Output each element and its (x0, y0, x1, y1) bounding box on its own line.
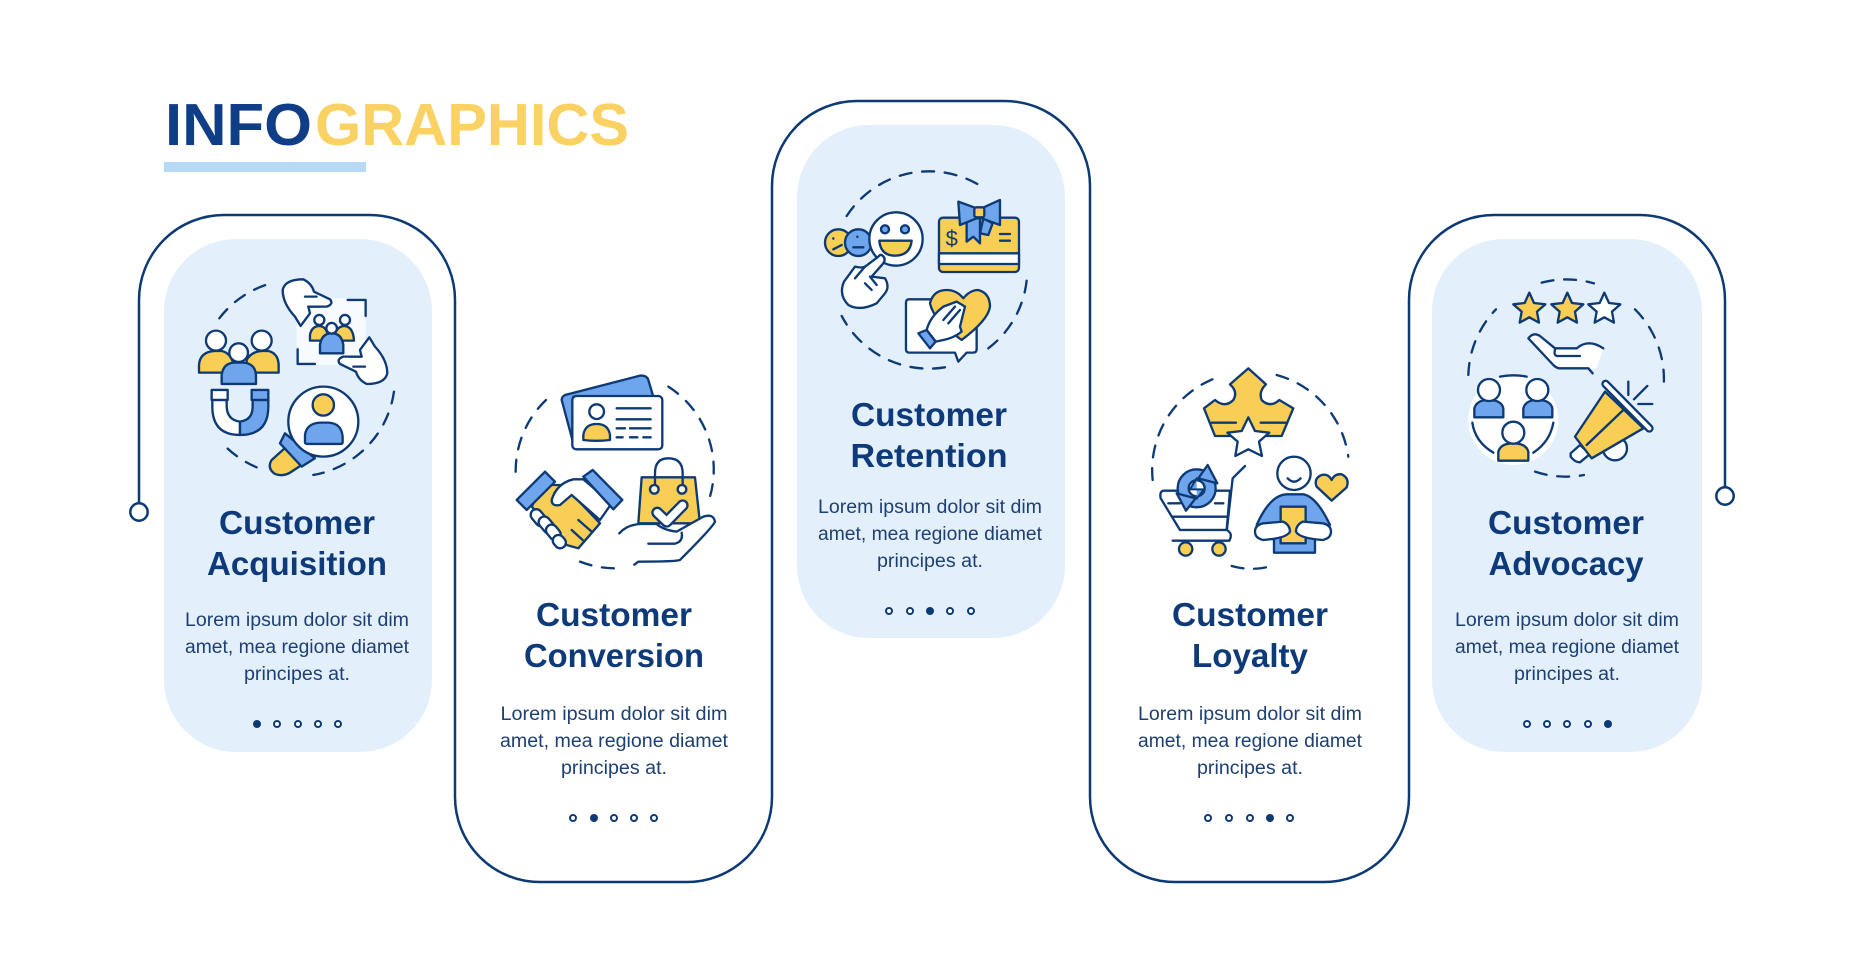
heading: Retention (850, 437, 1008, 474)
body text: Lorem ipsum dolor sit dim (185, 610, 409, 631)
heading: Conversion (524, 637, 704, 674)
pagination dots (253, 720, 341, 728)
heading: Acquisition (207, 545, 387, 582)
panel: customer loyalty (1138, 368, 1363, 822)
body text: Lorem ipsum dolor sit dim (1455, 610, 1679, 631)
icon: loyalty (1152, 368, 1348, 569)
title (165, 92, 629, 158)
heading (850, 396, 1008, 474)
icon: advocacy (1468, 279, 1664, 477)
heading: Customer (1172, 596, 1328, 633)
heading: Customer (851, 396, 1007, 433)
panel: customer advocacy (1432, 239, 1702, 752)
body text: amet, mea regione diamet (1138, 731, 1363, 752)
title underline (164, 162, 366, 172)
body text: principes at. (244, 664, 350, 685)
heading (1172, 596, 1328, 674)
body text (185, 610, 410, 685)
pagination dots (1205, 814, 1293, 822)
pagination dots (886, 607, 974, 615)
body text (1455, 610, 1680, 685)
icon: retention (825, 171, 1027, 369)
body text (1138, 704, 1363, 779)
icon: conversion (516, 376, 715, 568)
body text: amet, mea regione diamet (818, 524, 1043, 545)
heading: Loyalty (1192, 637, 1309, 674)
body text: principes at. (877, 551, 983, 572)
body text: Lorem ipsum dolor sit dim (818, 497, 1042, 518)
body text: principes at. (561, 758, 667, 779)
icon: acquisition (199, 279, 394, 475)
panel: customer retention (797, 125, 1065, 638)
heading (524, 596, 704, 674)
pagination dots (1524, 720, 1612, 728)
heading: Advocacy (1488, 545, 1644, 582)
body text (818, 497, 1043, 572)
body text: amet, mea regione diamet (500, 731, 729, 752)
heading (207, 504, 387, 582)
body text: Lorem ipsum dolor sit dim (500, 704, 728, 725)
body text: amet, mea regione diamet (185, 637, 410, 658)
pagination dots (570, 814, 657, 822)
body text: amet, mea regione diamet (1455, 637, 1680, 658)
panel: customer conversion (500, 376, 729, 822)
panel: customer acquisition (164, 239, 432, 752)
body text: principes at. (1197, 758, 1303, 779)
heading: Customer (1488, 504, 1644, 541)
title: GRAPHICS (315, 92, 629, 158)
icon: retention: $ (946, 226, 958, 251)
body text (500, 704, 729, 779)
heading (1488, 504, 1644, 582)
heading: Customer (536, 596, 692, 633)
heading: Customer (219, 504, 375, 541)
body text: principes at. (1514, 664, 1620, 685)
title: INFO (165, 92, 312, 158)
body text: Lorem ipsum dolor sit dim (1138, 704, 1362, 725)
serpentine outline connector (130, 101, 1734, 882)
